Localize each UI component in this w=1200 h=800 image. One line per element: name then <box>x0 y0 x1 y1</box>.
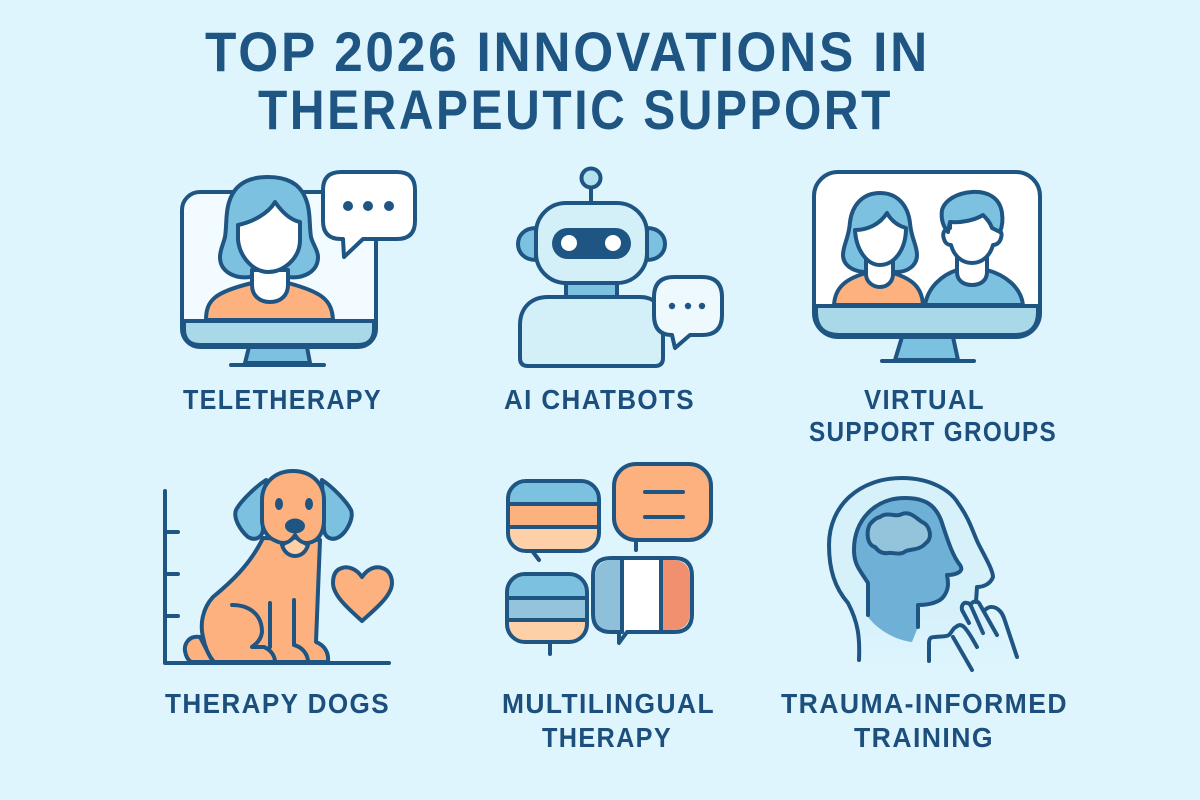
icon: brain cloud <box>868 513 930 554</box>
label: trauma-informed training <box>781 688 1068 753</box>
label: virtual support groups: SUPPORT GROUPS <box>809 416 1057 447</box>
panel: multilingual therapy <box>502 464 715 753</box>
panel: virtual support groups <box>809 172 1057 447</box>
label: multilingual therapy: MULTILINGUAL <box>502 688 715 719</box>
label: trauma-informed training: TRAINING <box>854 722 994 753</box>
panel: therapy dogs <box>165 471 392 719</box>
icon: heart <box>333 567 392 621</box>
icon: monitor with therapist <box>182 172 415 365</box>
icon: speech bubble D flag <box>593 558 692 643</box>
label: teletherapy: TELETHERAPY <box>183 384 382 415</box>
label: multilingual therapy <box>502 688 715 753</box>
icon: speech bubble B <box>614 464 711 550</box>
label: AI chatbots: AI CHATBOTS <box>504 384 695 415</box>
label: therapy dogs: THERAPY DOGS <box>165 688 390 719</box>
icon: robot <box>518 168 722 366</box>
icon: speech bubble A <box>508 481 599 560</box>
icon: dog <box>185 471 352 662</box>
title: TOP 2026 INNOVATIONS IN <box>205 20 930 83</box>
label: virtual support groups <box>809 384 1057 447</box>
icon: monitor with two people <box>814 172 1040 361</box>
title <box>205 20 930 141</box>
panel: teletherapy <box>182 172 415 415</box>
icon: hand <box>929 602 1017 670</box>
panel: trauma-informed training <box>781 478 1068 753</box>
panel: AI chatbots <box>504 168 722 415</box>
title: THERAPEUTIC SUPPORT <box>258 78 893 141</box>
label: multilingual therapy: THERAPY <box>542 722 672 753</box>
icon: height chart axis <box>165 491 389 663</box>
icon: speech bubble C <box>507 574 587 654</box>
label: trauma-informed training: TRAUMA-INFORMED <box>781 688 1068 719</box>
icon: head silhouette <box>829 478 1017 672</box>
label: virtual support groups: VIRTUAL <box>864 384 985 415</box>
